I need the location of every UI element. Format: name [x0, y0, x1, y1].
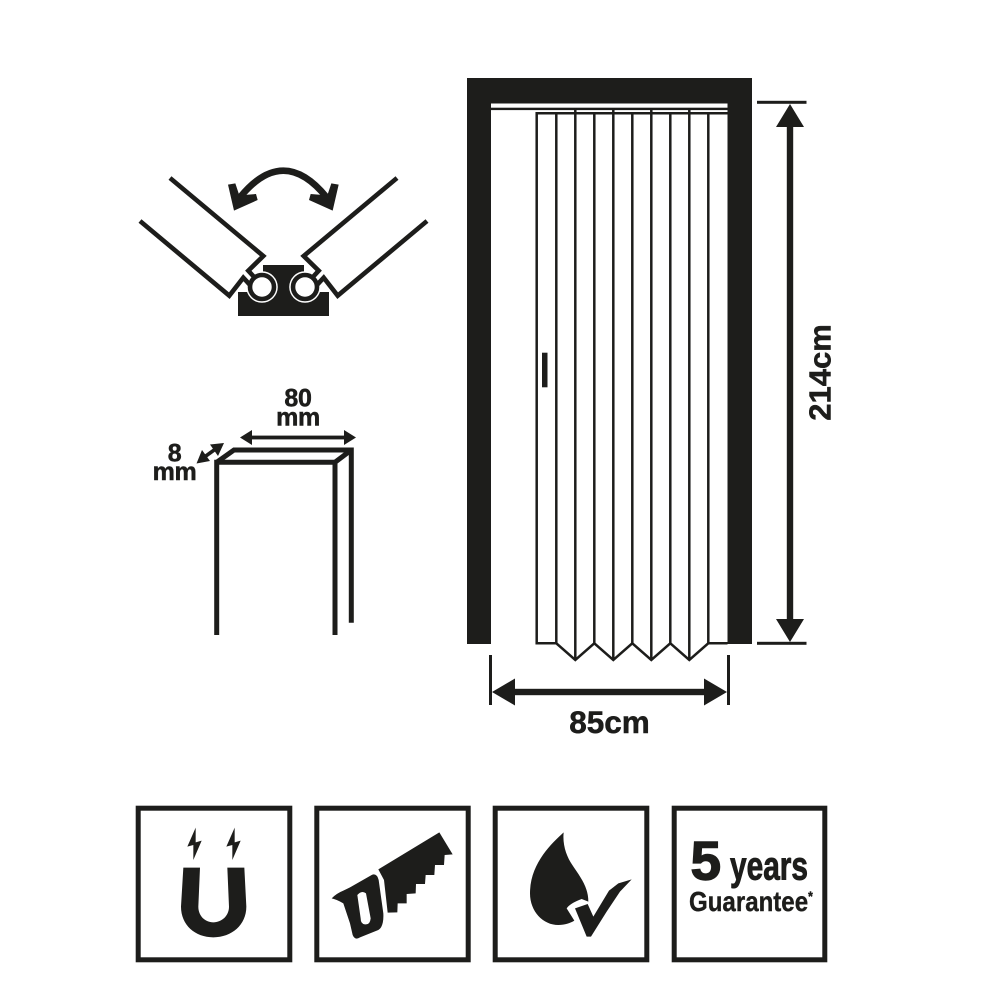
folding door panels: [537, 108, 728, 660]
feature box: water resistant: [495, 808, 647, 960]
text: 5: 5: [690, 829, 721, 891]
label: 80 mm: mm: [276, 404, 320, 432]
feature box: magnetic: [138, 808, 290, 960]
label: 85cm: 85cm: [569, 704, 650, 740]
door handle: [542, 353, 548, 387]
text: Guarantee: Guarantee: [689, 885, 808, 917]
base profile: [238, 265, 329, 316]
icon: double-headed rotation arrow: [228, 171, 339, 211]
top track: [491, 108, 728, 110]
feature box: can be cut with saw: [317, 808, 468, 960]
icon: water drop with check mark: [530, 832, 632, 937]
icon: hand saw: [332, 832, 453, 939]
door illustration: [467, 78, 752, 660]
height dimension arrow: [757, 101, 806, 645]
frame profile diagram: [153, 384, 356, 635]
feature box: 5 years guarantee: [674, 808, 825, 960]
label: 8 mm: mm: [153, 458, 196, 486]
hinge diagram: [140, 171, 427, 316]
label: 80 mm: 80: [284, 384, 312, 412]
left door panel: [140, 178, 263, 296]
right door panel: [304, 178, 427, 296]
width dimension arrow: [489, 655, 730, 706]
label: 8 mm: 8: [168, 440, 182, 468]
icon: magnet with bolts: [181, 828, 246, 937]
arrow: 8 mm depth: [196, 443, 224, 464]
text: years: years: [730, 844, 808, 888]
frame outline: [217, 450, 351, 635]
text: Guarantee: *: [808, 888, 814, 904]
arrow: 80 mm width: [240, 430, 356, 445]
door frame: [467, 78, 752, 644]
label: 214cm: 214cm: [802, 324, 838, 421]
